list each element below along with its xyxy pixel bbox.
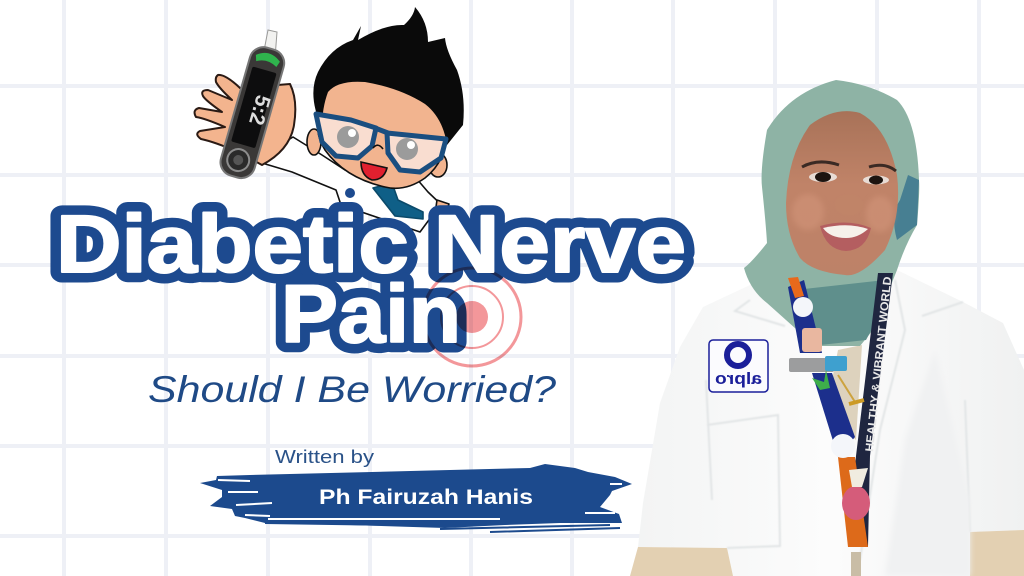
- eyebrows: [802, 162, 896, 171]
- title outline: Pain: [281, 269, 461, 360]
- mascot coat and arm: [262, 137, 449, 232]
- cheek highlights: [792, 194, 894, 232]
- brush streaks: [218, 480, 622, 519]
- glucose meter: [217, 30, 287, 181]
- mascot hair: [313, 7, 464, 145]
- mascot mouth: [361, 162, 387, 180]
- nose: [835, 195, 863, 215]
- name badge: [789, 356, 847, 372]
- meter reading: 5:2: [244, 92, 275, 128]
- author name: Ph Fairuzah Hanis: [319, 486, 533, 509]
- dark lanyard: [848, 273, 894, 547]
- gold necklace: [838, 375, 855, 402]
- title fill: [56, 199, 686, 360]
- subtitle: Should I Be Worried?: [148, 369, 556, 410]
- embroidered alpro logo: alpro: [715, 369, 762, 388]
- irises: [815, 172, 883, 184]
- mascot logo: [345, 188, 355, 198]
- mascot ears: [307, 129, 447, 177]
- title outline: [56, 199, 686, 360]
- lanyard pins: [842, 486, 870, 520]
- mascot nose: [373, 145, 383, 149]
- written by label: Written by: [275, 446, 375, 467]
- hijab lower shade: [795, 280, 885, 345]
- teeth: [823, 225, 868, 238]
- brush stroke name banner: [200, 464, 632, 532]
- title fill: Pain: [281, 269, 461, 360]
- eye whites: [809, 172, 889, 184]
- embroidered alpro logo: [709, 340, 768, 392]
- coat shadow: [885, 350, 970, 576]
- hijab drape: [744, 80, 919, 346]
- mascot hand: [195, 75, 295, 165]
- test strip: [263, 30, 277, 58]
- blue lanyard: [788, 277, 870, 576]
- smile: [820, 222, 871, 251]
- title outline: Diabetic Nerve: [56, 199, 686, 290]
- mascot glasses: [316, 114, 446, 172]
- pharmacist portrait: [630, 80, 1024, 576]
- pin character: [802, 328, 822, 352]
- lab coat: [638, 270, 1024, 576]
- mascot face: [318, 72, 447, 188]
- face: [786, 111, 898, 275]
- lanyard text: HEALTHY & VIBRANT WORLD: [864, 276, 894, 452]
- green clip: [812, 370, 830, 390]
- title fill: Diabetic Nerve: [56, 199, 686, 290]
- brush shape: [200, 464, 632, 532]
- right sleeve undershirt: [970, 530, 1024, 576]
- hijab print: [894, 175, 919, 240]
- mascot character holding glucose meter: [195, 7, 464, 232]
- pain target rings: [423, 268, 521, 366]
- coat fold shading: [706, 280, 970, 560]
- chest blouse: [832, 345, 862, 440]
- left sleeve undershirt: [630, 547, 733, 576]
- gold name pendant: [849, 400, 864, 404]
- title text: [56, 199, 686, 366]
